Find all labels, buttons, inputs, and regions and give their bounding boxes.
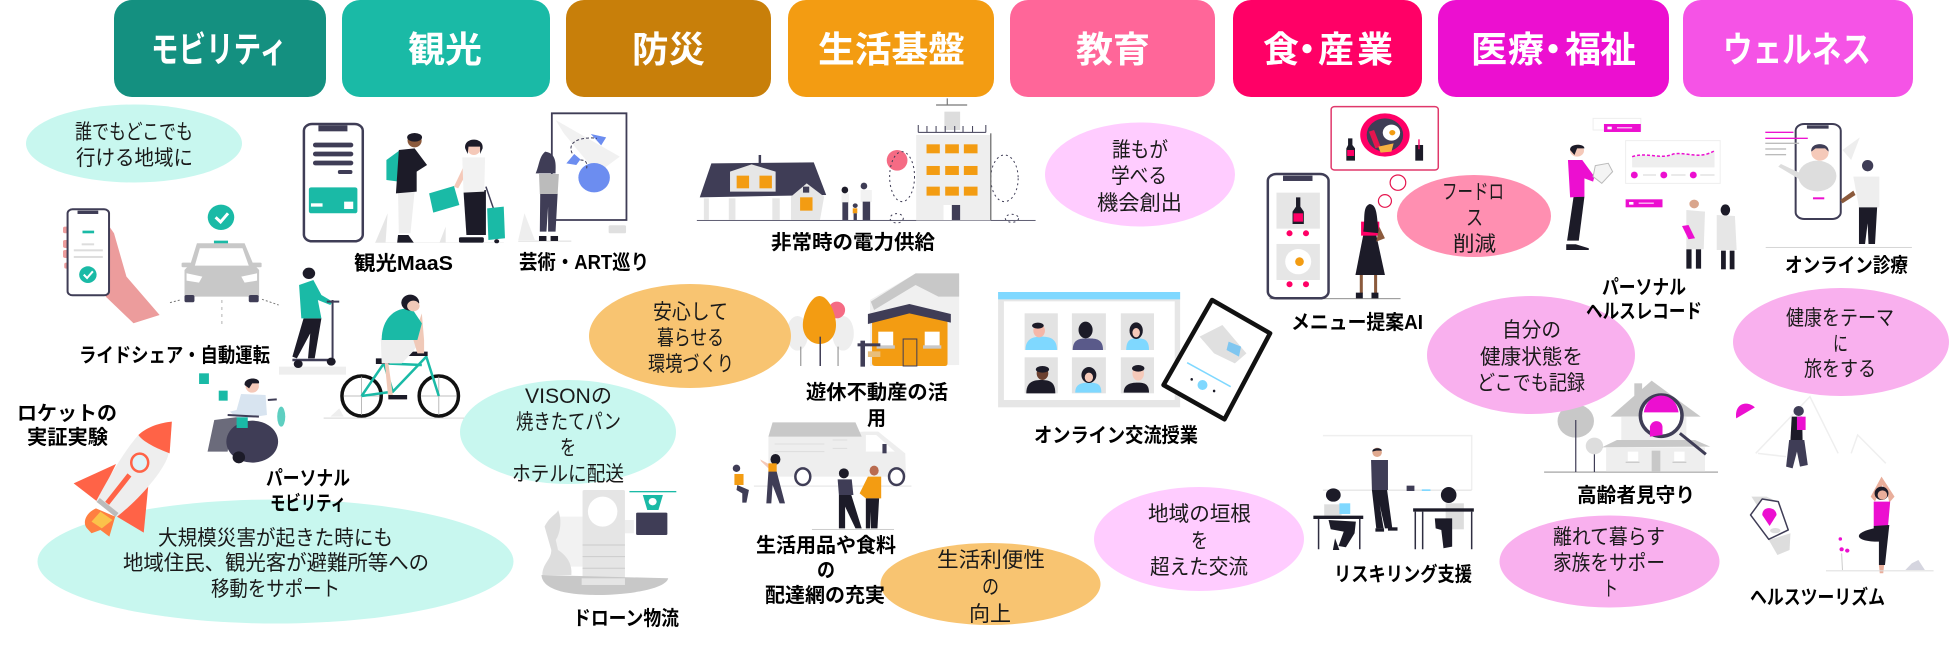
callout: 安心して暮らせる環境づくり: 環境づくり xyxy=(648,353,734,376)
label: パーソナルヘルスレコード xyxy=(1586,276,1702,323)
yoga woman xyxy=(1826,477,1934,573)
callout: 大規模災害 xyxy=(38,500,514,624)
callout: 健康をテーマに旅をする: 旅をする xyxy=(1804,358,1876,381)
callout: フードロス削減: ス xyxy=(1466,207,1483,230)
illustration: autonomous taxi xyxy=(170,205,279,327)
label: メニュー提案AI: メニュー提案AI xyxy=(1291,311,1423,334)
illustration: personal health record xyxy=(1566,118,1737,269)
callout: 自分の健康状態: どこでも記録 xyxy=(1477,372,1585,395)
callout: 大規模災害: 移動をサポート xyxy=(211,578,340,601)
learner right xyxy=(1413,487,1474,549)
label: パーソナルモビリティ xyxy=(266,467,350,515)
label: オンライン診療: オンライン診療 xyxy=(1785,254,1908,277)
header row xyxy=(114,0,1913,97)
label: 遊休不動産の活用 xyxy=(806,380,948,430)
callout: VISONの焼きたてパン: ホテルに配送 xyxy=(512,463,624,486)
label: 観光MaaS: 観光MaaS xyxy=(354,252,453,275)
callout: 誰でもどこでも: 誰でもどこでも xyxy=(75,121,193,144)
callout: 生活利便性の向上: の xyxy=(982,576,999,599)
label: 芸術・ART巡り: 芸術・ART巡り xyxy=(519,250,649,274)
label: 遊休不動産の活用: 遊休不動産の活 xyxy=(806,380,948,404)
header: 教育 xyxy=(1010,0,1215,97)
illustration: online class window and tablet xyxy=(998,292,1270,419)
header: 観光: 観光 xyxy=(408,29,482,70)
label: ライドシェア・自動運転: ライドシェア・自動運転 xyxy=(79,344,270,367)
tablet xyxy=(1164,300,1270,419)
phone xyxy=(1268,174,1329,298)
callout: 地域の垣根を超えた交流: 超えた交流 xyxy=(1150,556,1248,579)
callout: 安心して暮らせる環境づくり: 暮らせる xyxy=(657,327,724,350)
label: パーソナルモビリティ: パーソナル xyxy=(266,467,350,490)
food bubble xyxy=(1331,107,1438,170)
standing instructor xyxy=(1371,448,1398,532)
seated child and woman xyxy=(733,454,785,503)
header: ウェルネス xyxy=(1683,0,1913,97)
illustration: delivery van and people xyxy=(733,422,911,530)
header: 生活基盤: 生活基盤 xyxy=(818,29,965,70)
callout: 地域の垣根を超えた交流 xyxy=(1094,487,1304,591)
callout: VISONの焼きたてパン: VISONの xyxy=(525,385,612,408)
illustration: online medical consultation xyxy=(1765,124,1912,248)
label: パーソナルヘルスレコード: ヘルスレコード xyxy=(1586,301,1702,323)
callout: VISONの焼きたてパン xyxy=(460,380,676,486)
illustration: cyclist xyxy=(324,295,464,418)
traveller with suitcase xyxy=(429,140,505,243)
illustration: scooter rider xyxy=(279,268,346,375)
doctors xyxy=(1682,200,1737,269)
illustration: menu AI phone and woman xyxy=(1268,107,1438,299)
illustration: emergency power house and building xyxy=(697,98,1036,223)
label: 生活用品や食料の配達網の充実: の xyxy=(817,560,835,582)
apartment building xyxy=(916,98,991,220)
illustration: art viewing xyxy=(518,113,626,242)
hiker xyxy=(1786,406,1808,468)
callout: フードロス削減: フードロ xyxy=(1442,181,1504,204)
callout: 健康をテーマに旅をする xyxy=(1733,288,1949,396)
label: 非常時の電力供給: 非常時の電力供給 xyxy=(771,231,935,254)
illustration: hiker and yoga with watch xyxy=(1736,397,1934,573)
label: 生活用品や食料の配達網の充実: 配達網の充実 xyxy=(765,584,885,607)
callout: 誰もが学べる機会創出: 誰もが xyxy=(1112,139,1168,162)
callout: 自分の健康状態: 自分の xyxy=(1502,319,1561,342)
header: 観光 xyxy=(342,0,550,97)
illustration: rocket xyxy=(74,422,172,537)
callout: 離れて暮らす家族をサポート xyxy=(1500,516,1720,608)
callout: 大規模災害: 地域住民、観光客が避難所等への xyxy=(123,552,429,575)
callout: 生活利便性の向上 xyxy=(880,543,1100,626)
label: 生活用品や食料の配達網の充実 xyxy=(756,534,896,607)
illustration: elderly monitoring house xyxy=(1544,381,1718,472)
label: ロケットの実証実験: 実証実験 xyxy=(27,426,108,449)
traveller with backpack xyxy=(386,133,427,243)
callout: 誰もが学べる機会創出: 機会創出 xyxy=(1097,192,1182,215)
label: パーソナルモビリティ: モビリティ xyxy=(270,492,346,515)
illustration: drone delivery xyxy=(541,490,676,595)
label: リスキリング支援: リスキリング支援 xyxy=(1334,562,1472,586)
callout: フードロス削減: 削減 xyxy=(1453,233,1496,256)
illustration: vacant real estate house xyxy=(787,273,959,367)
label: ロケットの実証実験: ロケットの xyxy=(17,402,117,425)
callout: 健康をテーマに旅をする: 健康をテーマ xyxy=(1786,307,1894,330)
callout: 誰でもどこでも xyxy=(26,104,242,182)
family xyxy=(842,183,872,220)
ground line xyxy=(697,219,1036,222)
callout: 地域の垣根を超えた交流: を xyxy=(1191,530,1208,553)
label: ドローン物流: ドローン物流 xyxy=(573,607,679,630)
label: ヘルスツーリズム: ヘルスツーリズム xyxy=(1750,585,1885,609)
callout: 健康をテーマに旅をする: に xyxy=(1833,333,1848,356)
callout: 誰でもどこでも: 行ける地域に xyxy=(76,147,193,170)
callout: 地域の垣根を超えた交流: 地域の垣根 xyxy=(1148,503,1251,526)
video window xyxy=(998,292,1180,407)
man with clipboard xyxy=(1566,145,1613,250)
header: 食・産業: 食・産業 xyxy=(1263,29,1393,70)
callout: 安心して暮らせる環境づくり: 安心して xyxy=(653,301,728,324)
label: パーソナルヘルスレコード: パーソナル xyxy=(1602,276,1686,299)
header: 医療・福祉: 医療・福祉 xyxy=(1471,29,1636,70)
callout: 安心して暮らせる環境づくり xyxy=(589,284,791,388)
illustration: personal mobility wheelchair xyxy=(199,373,285,463)
illustration: reskilling classroom xyxy=(1313,436,1474,550)
illustration: phone with hand xyxy=(63,209,160,323)
magnifying glass xyxy=(1640,395,1706,454)
smart watch xyxy=(1751,497,1790,555)
header: 医療・福祉 xyxy=(1438,0,1669,97)
callout: 自分の健康状態 xyxy=(1427,296,1635,414)
callout: 大規模災害: 大規模災害が起きた時にも xyxy=(158,527,393,550)
label: オンライン交流授業: オンライン交流授業 xyxy=(1034,424,1198,447)
callout: 生活利便性の向上: 生活利便性 xyxy=(937,549,1045,572)
woman thinking xyxy=(1355,204,1385,298)
data panels xyxy=(1593,118,1720,207)
header: モビリティ: モビリティ xyxy=(151,29,287,70)
callout: 離れて暮らす家族をサポート: ト xyxy=(1603,578,1618,601)
label: 高齢者見守り: 高齢者見守り xyxy=(1577,484,1695,507)
header: 生活基盤 xyxy=(788,0,994,97)
header: 食・産業 xyxy=(1233,0,1422,97)
thought bubbles xyxy=(1378,175,1406,207)
label: 生活用品や食料の配達網の充実: 生活用品や食料 xyxy=(756,534,896,557)
callout: VISONの焼きたてパン: を xyxy=(560,437,576,460)
header: 防災 xyxy=(566,0,771,97)
callout: フードロス削減 xyxy=(1397,175,1551,257)
label: 遊休不動産の活用: 用 xyxy=(867,408,886,430)
two people handing over goods xyxy=(812,466,894,530)
callout: 誰もが学べる機会創出 xyxy=(1045,122,1235,226)
illustration: tourism MaaS phone and travellers xyxy=(304,124,505,243)
header: 防災: 防災 xyxy=(632,29,705,70)
trees xyxy=(887,150,1019,223)
header: ウェルネス: ウェルネス xyxy=(1723,29,1871,70)
header: 教育: 教育 xyxy=(1076,29,1150,70)
callout: 離れて暮らす家族をサポート: 離れて暮らす xyxy=(1553,526,1665,549)
phone with card xyxy=(304,124,363,241)
callout: 誰もが学べる機会創出: 学べる xyxy=(1111,165,1167,188)
learner left xyxy=(1313,488,1363,550)
callout: 自分の健康状態: 健康状態を xyxy=(1480,346,1583,369)
callout: 生活利便性の向上: 向上 xyxy=(969,603,1011,626)
callout: VISONの焼きたてパン: 焼きたてパン xyxy=(516,411,621,434)
callout: 離れて暮らす家族をサポート: 家族をサポー xyxy=(1553,552,1665,575)
label: ロケットの実証実験 xyxy=(17,402,117,449)
house xyxy=(700,155,826,220)
header: モビリティ xyxy=(114,0,326,97)
